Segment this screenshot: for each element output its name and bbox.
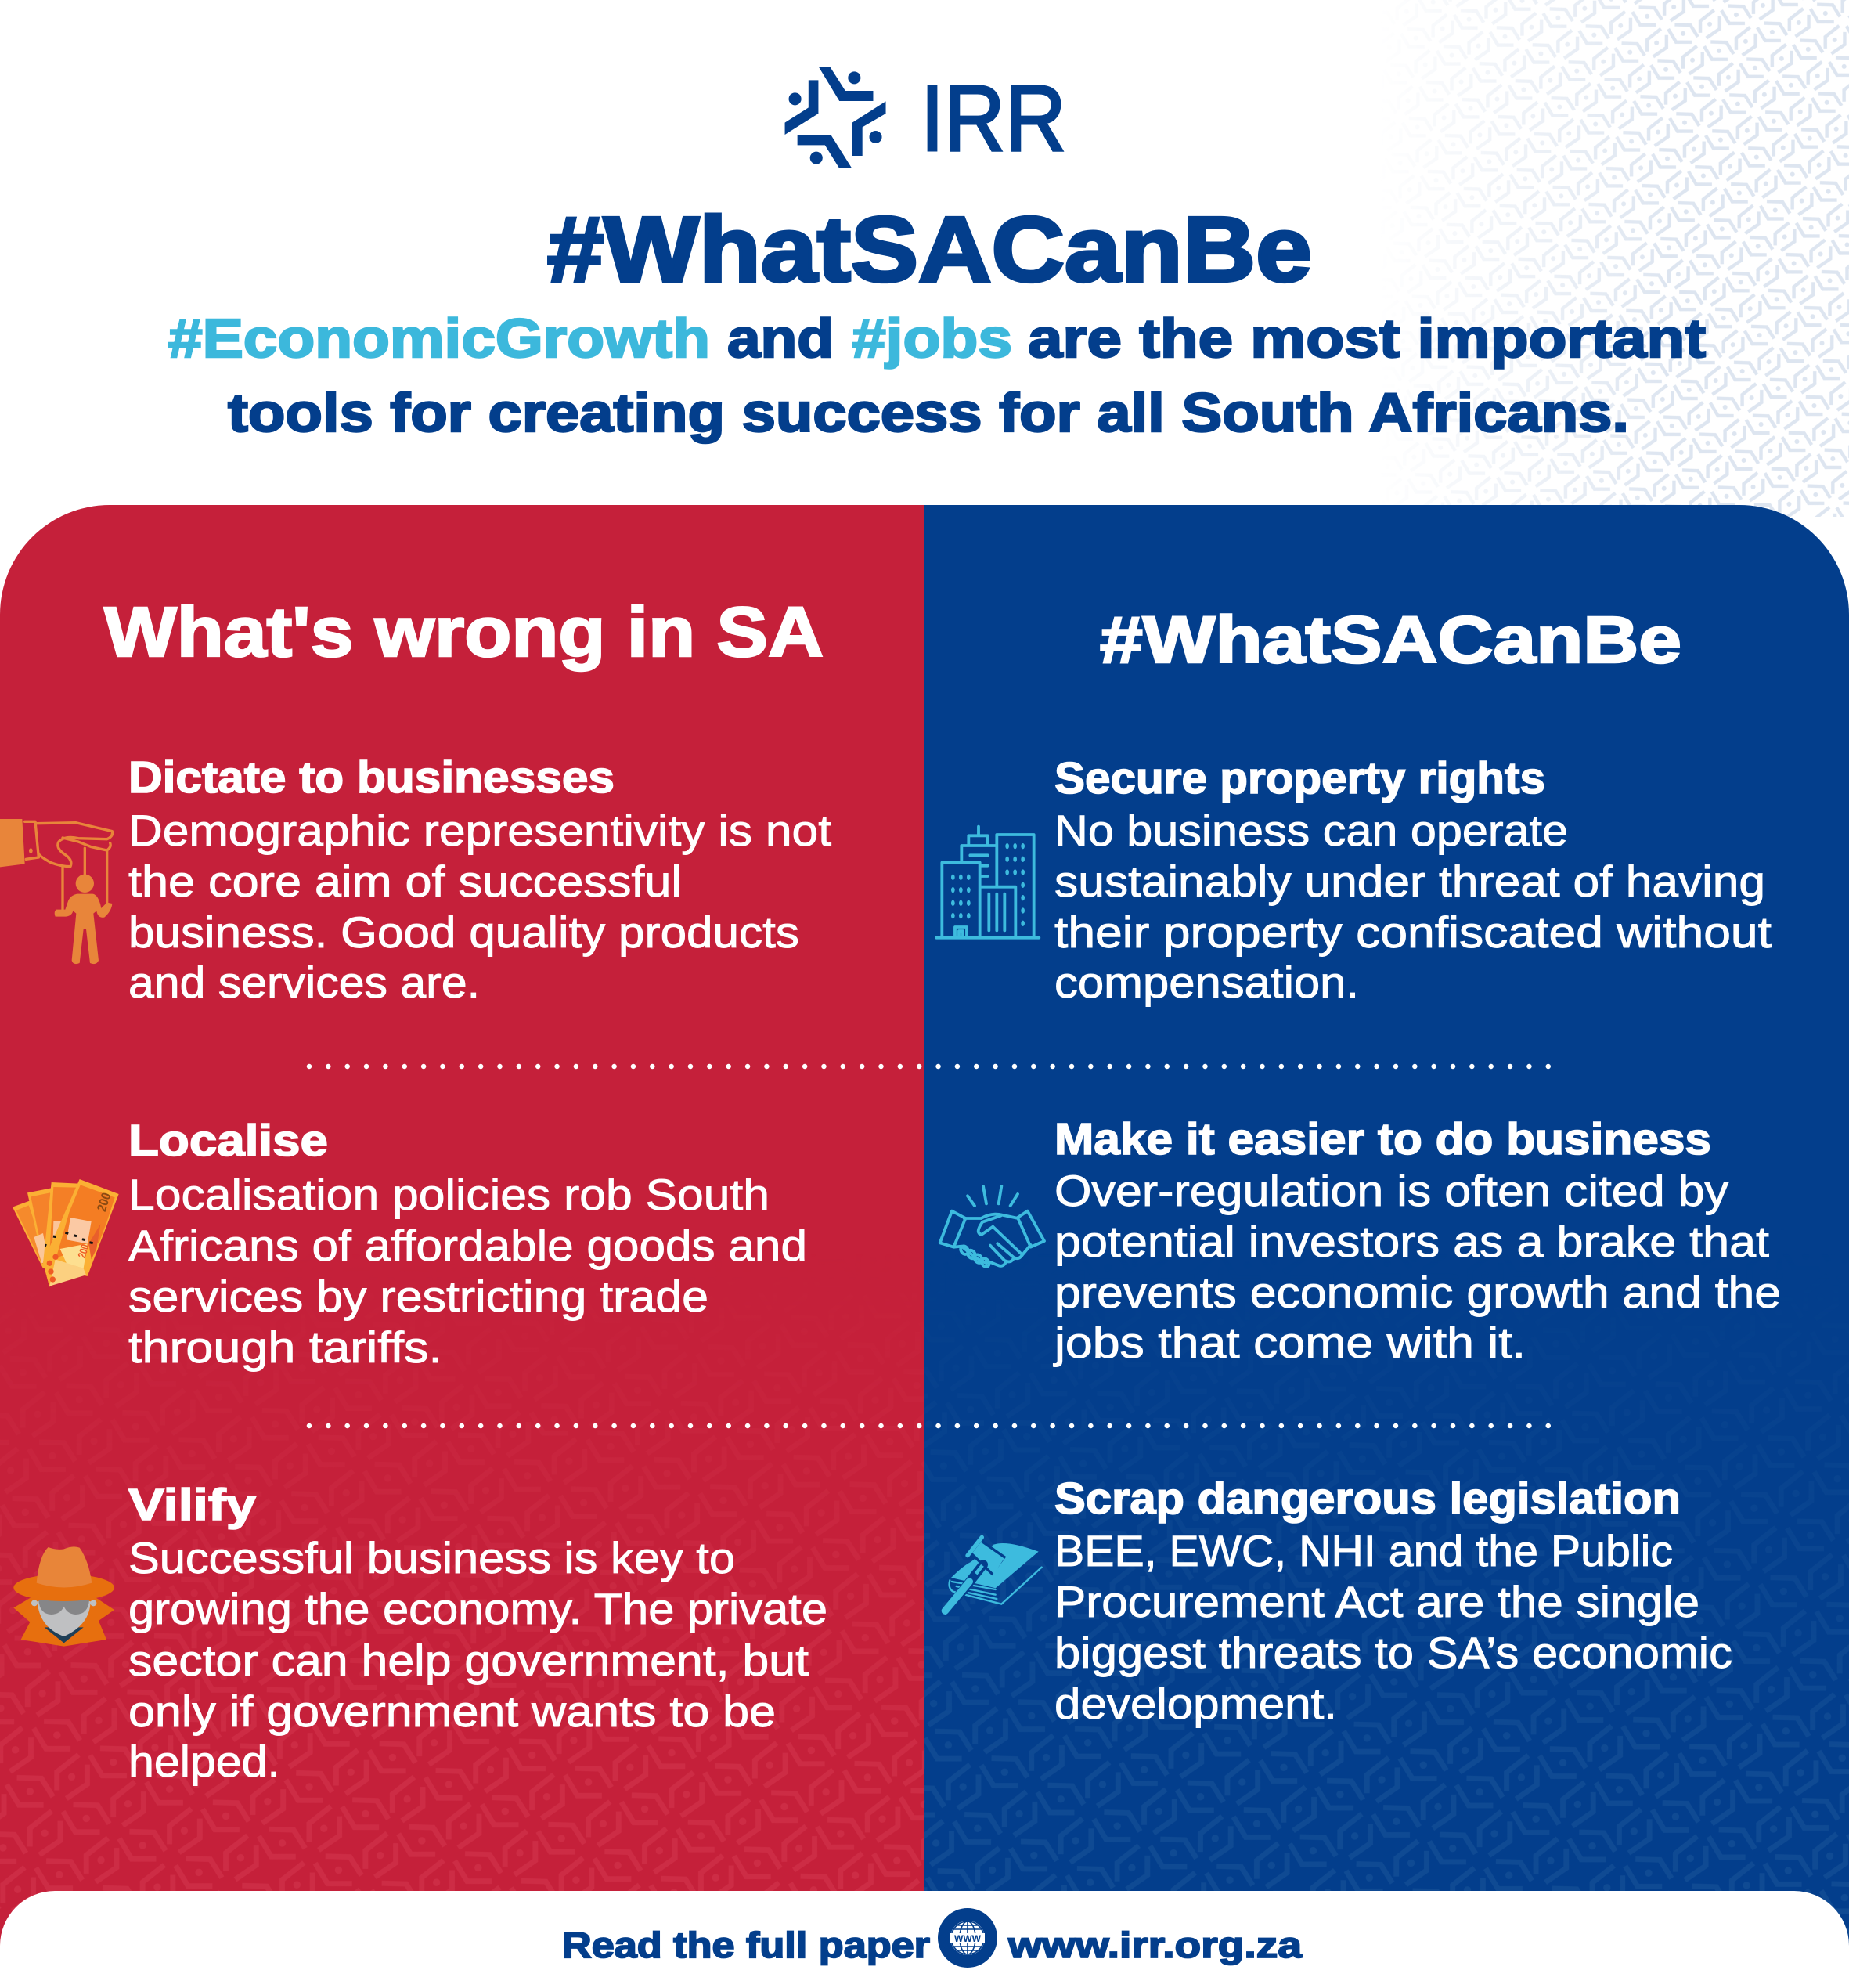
item: Dictate to businesses: Demographic representivity is not bbox=[128, 806, 831, 855]
item: Vilify: growing the economy. The private bbox=[128, 1584, 827, 1633]
item: Scrap dangerous legislation: Scrap dangerous legislation bbox=[1054, 1474, 1681, 1524]
item: Localise: through tariffs. bbox=[128, 1322, 442, 1372]
icon: globe: WWW bbox=[954, 1933, 982, 1944]
logo wordmark: IRR bbox=[921, 66, 1066, 171]
item: Secure property rights: sustainably under threat of having bbox=[1054, 857, 1765, 906]
subtitle: and bbox=[727, 308, 834, 369]
subtitle: #jobs bbox=[852, 308, 1012, 369]
item: Make it easier to do business bbox=[1053, 1114, 1781, 1367]
footer text: read the full paper: Read the full paper bbox=[562, 1925, 930, 1965]
icon: handshake bbox=[940, 1186, 1044, 1268]
icon: gavel and book bbox=[945, 1537, 1042, 1611]
subtitle bbox=[168, 308, 1706, 443]
item: Vilify bbox=[128, 1480, 827, 1786]
item: Localise: Localisation policies rob South bbox=[128, 1170, 770, 1219]
item: Scrap dangerous legislation: BEE, EWC, NHI and the Public bbox=[1054, 1526, 1673, 1575]
item: Scrap dangerous legislation: development. bbox=[1054, 1679, 1337, 1728]
item: Vilify: only if government wants to be bbox=[128, 1687, 776, 1736]
subtitle: tools for creating success for all South Africans. bbox=[228, 382, 1629, 443]
item: Dictate to businesses bbox=[128, 752, 831, 1007]
item: Dictate to businesses: Dictate to businesses bbox=[128, 752, 615, 803]
item: Vilify: helped. bbox=[128, 1737, 280, 1786]
item: Secure property rights: compensation. bbox=[1054, 958, 1359, 1007]
item: Localise: services by restricting trade bbox=[128, 1272, 708, 1321]
item: Localise: Africans of affordable goods and bbox=[128, 1221, 807, 1270]
item: Vilify: Successful business is key to bbox=[128, 1533, 735, 1582]
icon: spy bbox=[13, 1546, 114, 1647]
item: Secure property rights: Secure property rights bbox=[1054, 753, 1545, 803]
heading: #WhatSACanBe: #WhatSACanBe bbox=[1100, 603, 1681, 676]
icon: IRR star mark bbox=[785, 67, 886, 168]
item: Scrap dangerous legislation: Procurement Act are the single bbox=[1054, 1577, 1699, 1626]
item: Make it easier to do business: jobs that come with it. bbox=[1053, 1318, 1526, 1367]
icon: puppet hand bbox=[0, 819, 113, 964]
item: Scrap dangerous legislation bbox=[1054, 1474, 1732, 1728]
icon: banknotes bbox=[13, 1179, 119, 1286]
logo: IRR bbox=[785, 66, 1066, 171]
item: Vilify: Vilify bbox=[128, 1480, 256, 1530]
subtitle: #EconomicGrowth bbox=[168, 308, 710, 369]
footer bbox=[0, 1891, 1849, 1988]
item: Dictate to businesses: and services are. bbox=[128, 958, 480, 1007]
title: #WhatSACanBe bbox=[547, 198, 1312, 301]
item: Secure property rights bbox=[1054, 753, 1772, 1007]
subtitle: are the most important bbox=[1028, 308, 1706, 369]
item: Vilify: sector can help government, but bbox=[128, 1636, 809, 1685]
item: Localise bbox=[128, 1116, 807, 1372]
divider: dotted line 2 bbox=[309, 1423, 1550, 1428]
item: Scrap dangerous legislation: biggest threats to SA’s economic bbox=[1054, 1628, 1732, 1677]
item: Dictate to businesses: the core aim of successful bbox=[128, 857, 682, 906]
heading: What's wrong in SA: What's wrong in SA bbox=[104, 594, 824, 672]
icon: banknotes: 200 bbox=[94, 1191, 114, 1214]
item: Make it easier to do business: prevents economic growth and the bbox=[1054, 1268, 1781, 1317]
panel: what's wrong in SA bbox=[0, 505, 924, 1988]
divider: dotted line 1 bbox=[309, 1064, 1550, 1069]
icon: globe bbox=[938, 1908, 997, 1968]
item: Secure property rights: No business can operate bbox=[1054, 806, 1568, 855]
item: Secure property rights: their property confiscated without bbox=[1054, 907, 1772, 957]
icon: buildings bbox=[936, 827, 1039, 938]
icon: banknotes: 200 bbox=[75, 1243, 92, 1260]
item: Make it easier to do business: Make it easier to do business bbox=[1054, 1114, 1711, 1164]
item: Dictate to businesses: business. Good quality products bbox=[128, 907, 799, 957]
item: Make it easier to do business: potential investors as a brake that bbox=[1054, 1217, 1769, 1266]
item: Make it easier to do business: Over-regulation is often cited by bbox=[1054, 1166, 1728, 1215]
item: Localise: Localise bbox=[128, 1116, 328, 1166]
footer text: website: www.irr.org.za bbox=[1007, 1925, 1302, 1965]
panel: #WhatSACanBe bbox=[924, 505, 1849, 1988]
